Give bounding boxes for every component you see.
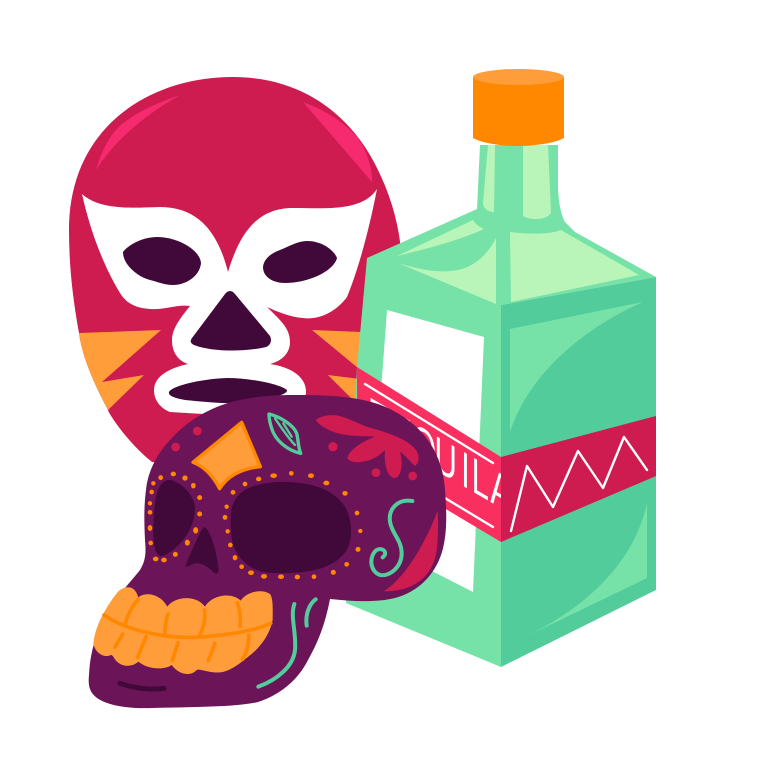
band right face [501, 416, 656, 542]
tequila bottle [346, 69, 656, 667]
left eye socket [153, 480, 195, 556]
band lines [365, 384, 493, 527]
green leaf [269, 414, 301, 453]
mask white face pattern [82, 189, 377, 418]
sugar skull [89, 395, 446, 708]
mask highlight right [303, 102, 372, 182]
chin mark [120, 683, 164, 689]
mask head [69, 77, 402, 470]
green swirl [371, 501, 412, 575]
mask right eye [263, 241, 337, 283]
red dots [171, 427, 417, 480]
teeth [93, 587, 273, 674]
red flower [316, 415, 419, 478]
mask highlight left [96, 95, 180, 170]
mask mouth [169, 378, 287, 403]
jaw green lines [258, 599, 316, 687]
orange forehead diamond [193, 422, 260, 489]
right eye socket [231, 482, 351, 573]
bottle glass left side [346, 145, 656, 667]
band zigzag [511, 437, 647, 531]
red crescent [384, 511, 438, 591]
mask orange stripes left [79, 330, 161, 410]
skull nose [185, 527, 219, 574]
mask left eye [123, 237, 201, 285]
shoulder highlights [397, 145, 639, 304]
teeth lines [104, 599, 271, 661]
orange eye dots [148, 471, 362, 579]
bottle cap [473, 69, 564, 146]
right face upper highlight [510, 302, 643, 432]
bottle label [370, 310, 484, 592]
bottle glass right face [501, 277, 656, 667]
mask orange stripes right [312, 330, 362, 405]
band text: TEQUILA [370, 388, 511, 525]
right face lower highlight [527, 503, 647, 636]
skull body [89, 395, 446, 708]
mask nose [191, 291, 271, 351]
wrestling mask [69, 77, 402, 470]
band left face [357, 367, 501, 542]
